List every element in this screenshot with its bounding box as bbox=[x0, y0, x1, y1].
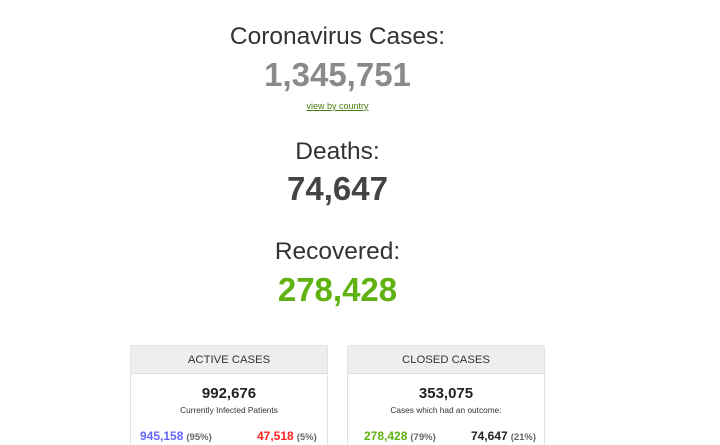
panel title: active cases: ACTIVE CASES bbox=[188, 354, 270, 366]
deaths number: 74,647 bbox=[287, 170, 388, 207]
heading: recovered: Recovered: bbox=[275, 238, 400, 265]
mild cases stat: 945,158 (95%) bbox=[140, 429, 212, 443]
panel: closed cases bbox=[347, 345, 545, 445]
closed cases total: 353,075 bbox=[419, 385, 473, 402]
critical cases stat: 47,518 (5%) bbox=[257, 429, 317, 443]
deaths stat: 74,647 (21%) bbox=[471, 429, 536, 443]
panel: active cases bbox=[130, 345, 328, 445]
panel title: closed cases: CLOSED CASES bbox=[402, 354, 490, 366]
recovered number: 278,428 bbox=[278, 271, 397, 308]
active cases caption: Currently Infected Patients bbox=[180, 405, 278, 415]
link: view by country: view by country bbox=[306, 101, 369, 111]
panel header: active cases bbox=[131, 346, 327, 374]
recovered stat: 278,428 (79%) bbox=[364, 429, 436, 443]
heading: deaths: Deaths: bbox=[295, 138, 380, 165]
panel header: closed cases bbox=[348, 346, 544, 374]
active cases total: 992,676 bbox=[202, 385, 256, 402]
heading: coronavirus cases: Coronavirus Cases: bbox=[230, 23, 445, 50]
closed cases caption: Cases which had an outcome: bbox=[390, 405, 502, 415]
total cases number: 1,345,751 bbox=[264, 56, 411, 93]
